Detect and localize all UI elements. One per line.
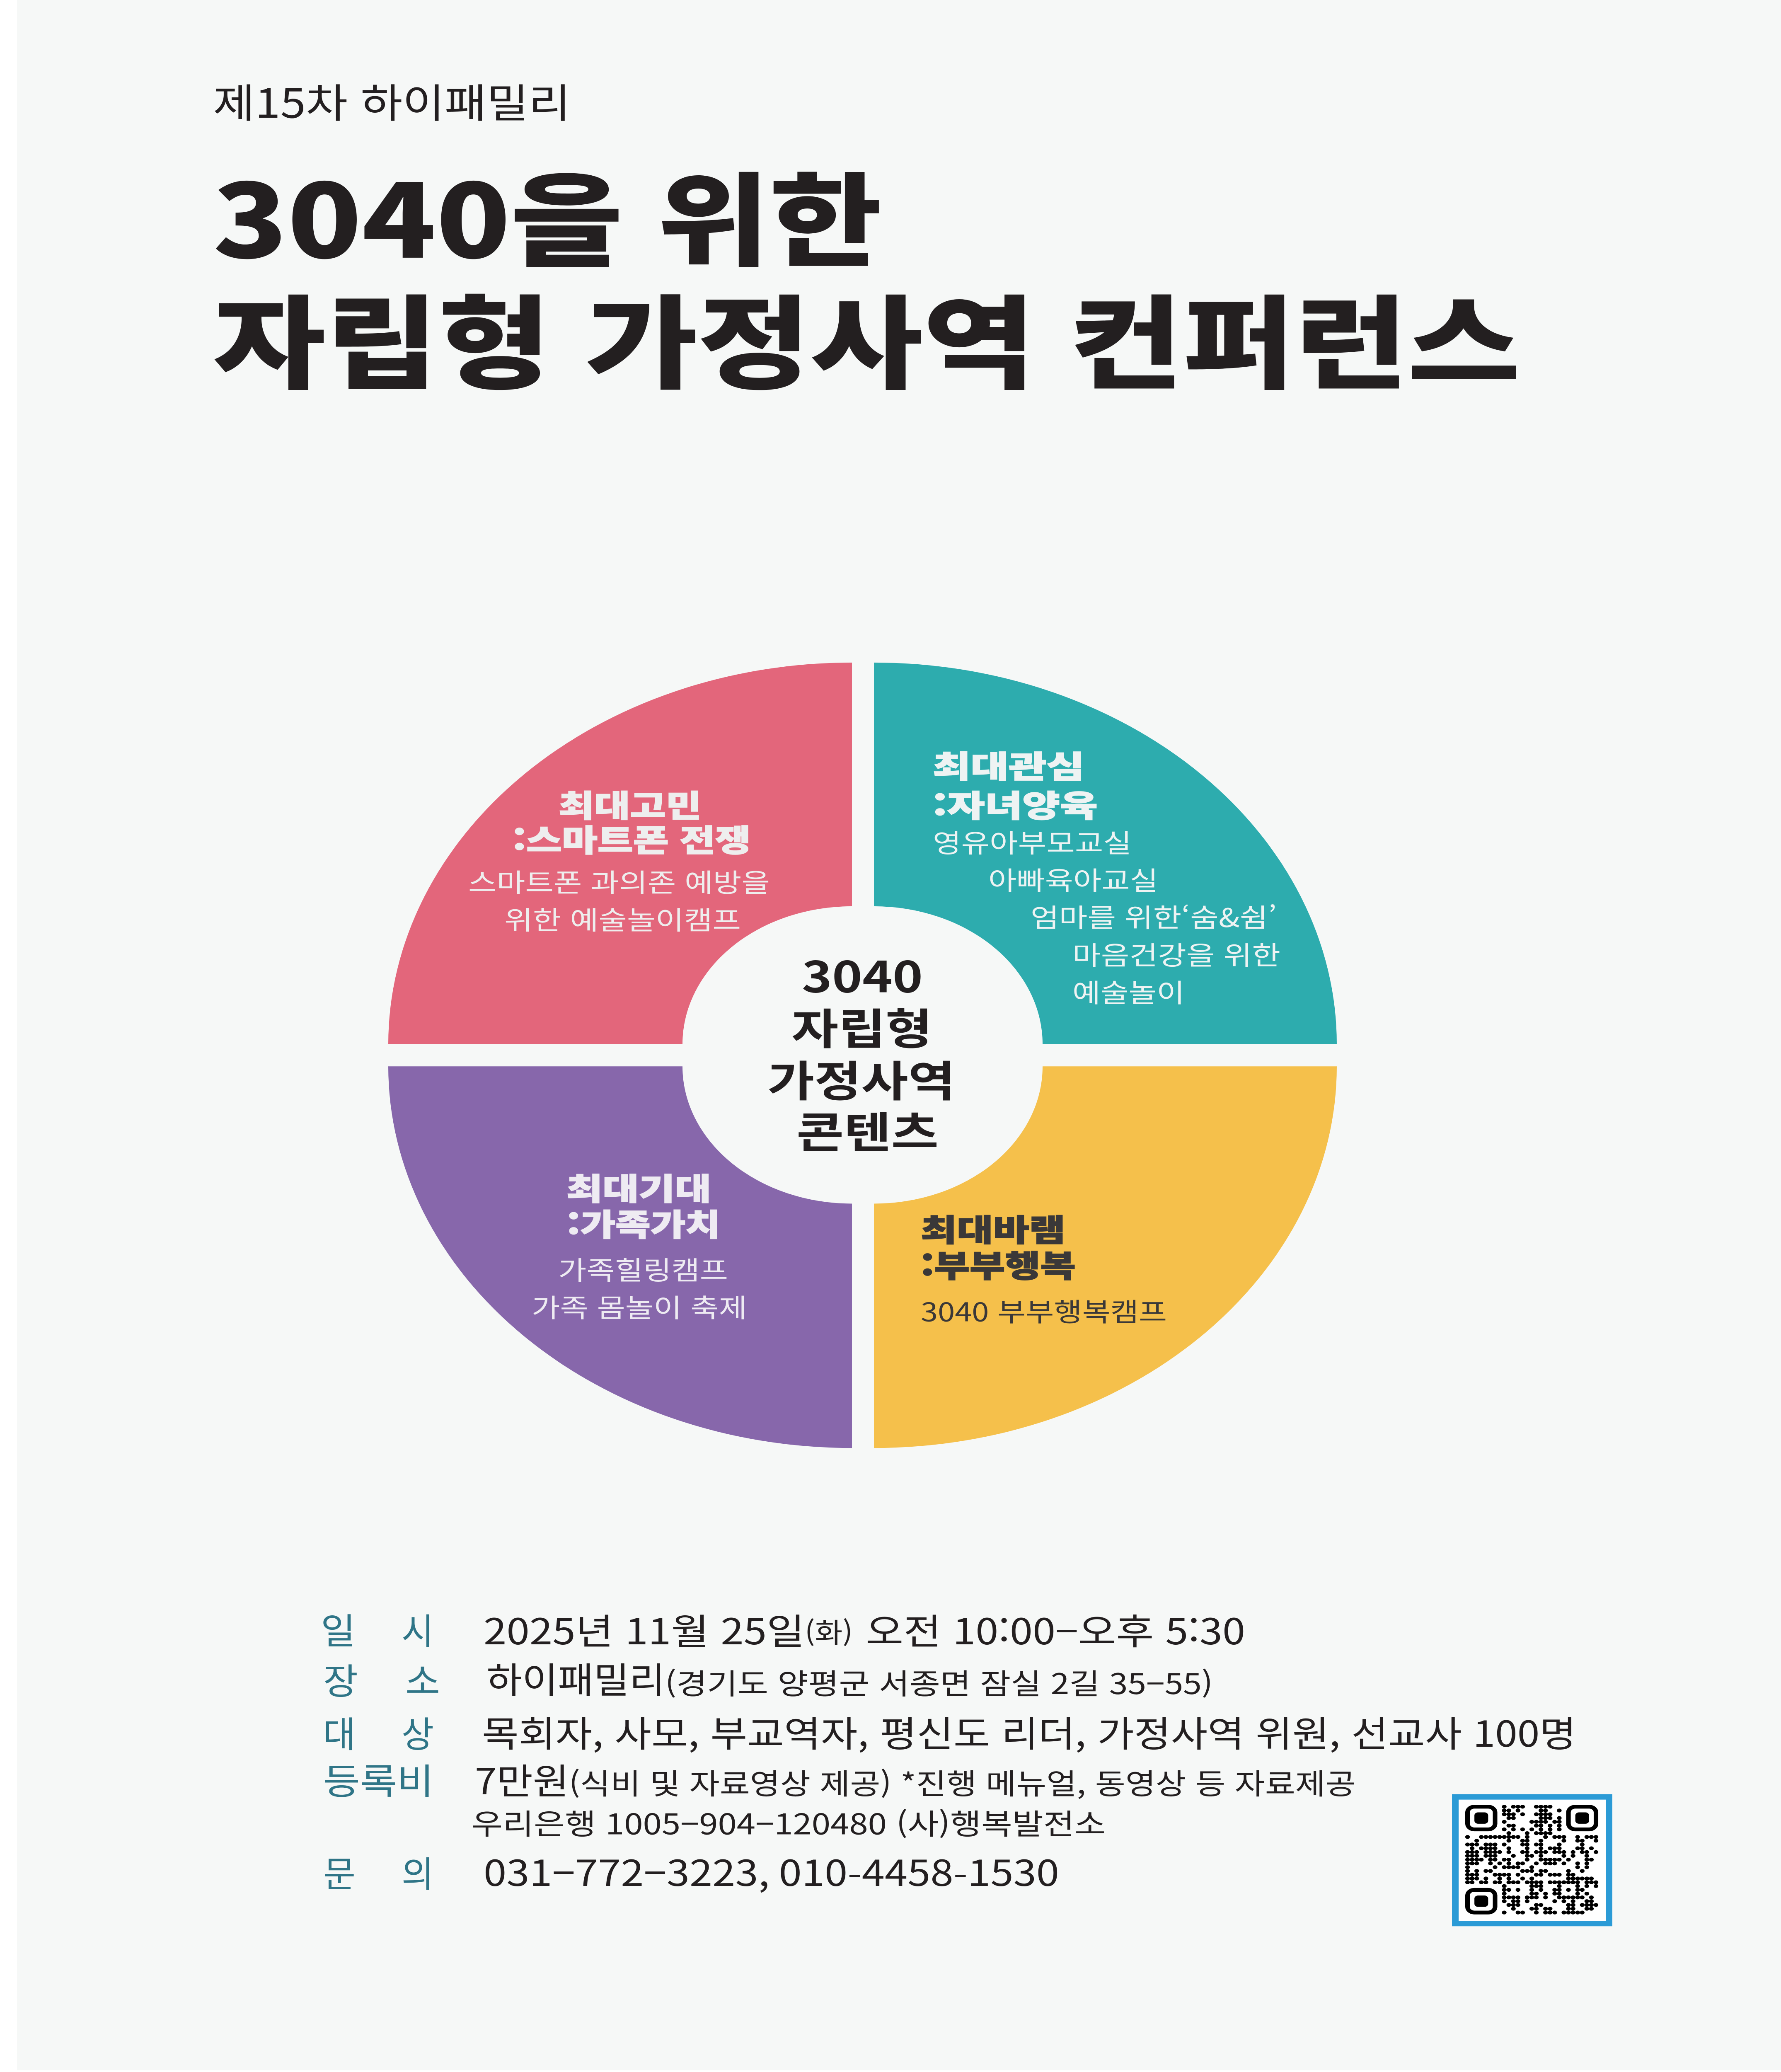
panel: 최대고민: 위한 예술놀이캠프 — [504, 900, 741, 937]
panel: 최대고민 — [388, 663, 852, 1044]
panel: 최대관심: 엄마를 위한‘숨&쉼’ — [1031, 897, 1277, 935]
panel: 최대기대: 가족 몸놀이 축제 — [532, 1288, 747, 1325]
panel: 최대관심: 마음건강을 위한 — [1072, 935, 1280, 973]
row: audience: 상 — [402, 1705, 434, 1757]
QR code — [1455, 1797, 1609, 1924]
row: audience: 목회자, 사모, 부교역자, 평신도 리더, 가정사역 위원, 선교사 100명 — [482, 1705, 1576, 1757]
panel: 최대고민: 스마트폰 과의존 예방을 — [468, 862, 770, 900]
center label: 가정사역 — [767, 1047, 955, 1109]
row: contact: 031−772−3223, 010-4458-1530 — [484, 1844, 1059, 1896]
center label: 3040 — [802, 943, 923, 1005]
row: place: 장 — [323, 1652, 358, 1704]
row: date: 일 — [321, 1602, 356, 1654]
panel: 최대기대 — [388, 1066, 852, 1448]
row: date: 오전 10:00−오후 5:30 — [866, 1602, 1245, 1655]
row: date — [321, 1602, 1245, 1655]
center label — [767, 943, 955, 1160]
row: date: 2025년 11월 25일 — [484, 1602, 805, 1655]
panel: 최대바램: 최대바램 — [921, 1205, 1065, 1250]
center label: 콘텐츠 — [796, 1098, 939, 1160]
panel: 최대바램 — [874, 1066, 1337, 1448]
title — [213, 140, 1520, 410]
pie diagram — [388, 663, 1337, 1448]
row: place: 하이패밀리 — [486, 1651, 665, 1704]
row: place: (경기도 양평군 서종면 잠실 2길 35−55) — [665, 1661, 1213, 1703]
row: fee: 우리은행 1005−904−120480 (사)행복발전소 — [472, 1802, 1106, 1843]
panel: 최대기대: 최대기대 — [566, 1164, 711, 1209]
panel: 최대관심 — [874, 663, 1337, 1044]
panel: 최대관심: :자녀양육 — [933, 781, 1098, 826]
row: date: 시 — [402, 1602, 434, 1654]
panel: 최대관심: 아빠육아교실 — [988, 860, 1158, 898]
row: audience: 대 — [323, 1705, 356, 1757]
event details — [321, 1602, 1576, 1898]
row: fee: 7만원 — [475, 1752, 569, 1805]
row: place — [323, 1651, 1213, 1704]
row: date: (화) — [805, 1611, 853, 1651]
title: 자립형 가정사역 컨퍼런스 — [213, 262, 1520, 410]
title: 3040을 위한 — [213, 140, 882, 287]
center label: 자립형 — [791, 995, 932, 1056]
row: contact: 문 — [323, 1845, 356, 1898]
row: fee: (식비 및 자료영상 제공) *진행 메뉴얼, 동영상 등 자료제공 — [569, 1761, 1356, 1803]
row: fee — [323, 1752, 1356, 1843]
panel: 최대고민: 최대고민 — [559, 781, 702, 826]
panel: 최대기대: 가족힐링캠프 — [558, 1250, 728, 1288]
panel: 최대고민: :스마트폰 전쟁 — [513, 816, 751, 860]
row: contact: 의 — [402, 1845, 434, 1898]
panel: 최대관심: 최대관심 — [933, 742, 1084, 787]
row: fee: 등록비 — [323, 1752, 434, 1805]
panel: 최대기대: :가족가치 — [567, 1200, 721, 1244]
panel: 최대바램: :부부행복 — [921, 1241, 1076, 1286]
subtitle: 제15차 하이패밀리 — [213, 72, 571, 130]
row: place: 소 — [405, 1652, 440, 1704]
panel: 최대관심: 예술놀이 — [1072, 973, 1185, 1010]
panel: 최대관심: 영유아부모교실 — [933, 823, 1132, 860]
panel: 최대바램: 3040 부부행복캠프 — [921, 1292, 1167, 1329]
